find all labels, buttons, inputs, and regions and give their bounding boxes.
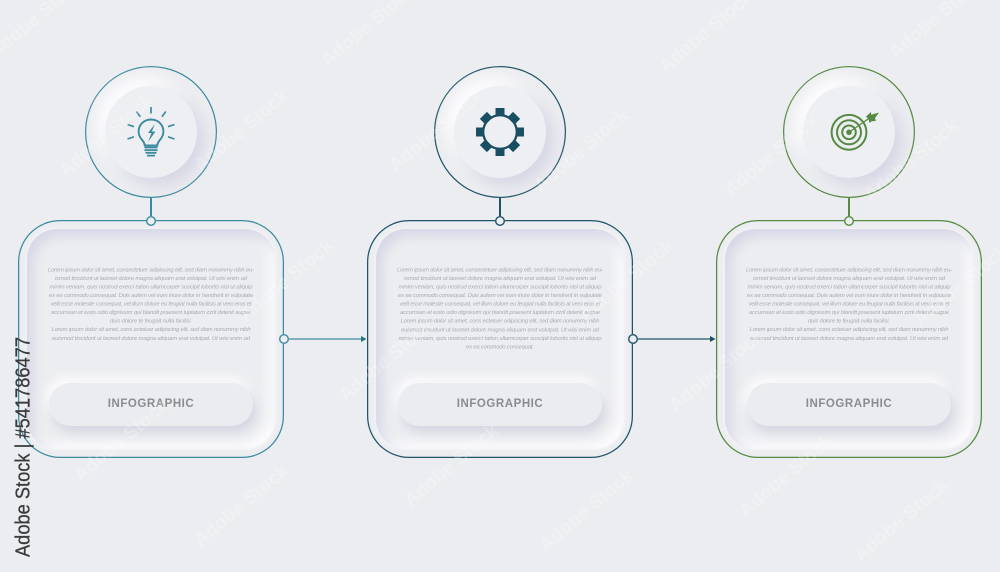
icon: gear bbox=[476, 108, 524, 156]
arrow 2 to 3 bbox=[638, 336, 716, 342]
watermarks: Adobe Stock bbox=[530, 105, 633, 196]
text block bbox=[48, 268, 254, 342]
watermarks: Adobe Stock bbox=[665, 325, 768, 416]
panel outline bbox=[716, 220, 982, 458]
watermarks: Adobe Stock bbox=[235, 235, 338, 326]
text block: accumsan et iusto odio dignissim qui blandit praesent luptatum zzril delenit augue bbox=[51, 310, 252, 316]
text block: Lorem ipsum dolor sit amet, cons ectetuer adipiscing elit, sed diam nonummy nibh bbox=[750, 327, 948, 333]
text block: Lorem ipsum dolor sit amet, consectetuer adipiscing elit, sed diam nonummy nibh eu- bbox=[397, 267, 603, 273]
watermarks: Adobe Stock bbox=[850, 475, 953, 566]
text block: euismod tincidunt ut laoreet dolore magna aliquam erat volutpat. Ut wisi enim ad bbox=[750, 336, 949, 342]
inset card bbox=[27, 229, 275, 449]
connector node top bbox=[146, 216, 156, 226]
text block: minim veniam, quis nostrud exerci tation ullamcorper suscipit lobortis nisl ut aliquip bbox=[50, 285, 253, 291]
text block: euismod tincidunt ut laoreet dolore magna aliquam erat volutpat. Ut wisi enim ad bbox=[52, 336, 251, 342]
text block: velit esse molestie consequat, vel illum dolore eu feugiat nulla facilisis at vero eros et bbox=[748, 302, 950, 308]
text block: duis dolore te feugait nulla facilisi. bbox=[808, 319, 890, 325]
panel outline bbox=[18, 220, 284, 458]
icon ring bbox=[85, 66, 217, 198]
watermarks: Adobe Stock bbox=[55, 90, 158, 181]
text block: Lorem ipsum dolor sit amet, consectetuer adipiscing elit, sed diam nonummy nibh eu- bbox=[48, 268, 254, 274]
text block: minim veniam, quis nostrud exerci tation ullamcorper suscipit lobortis nisl ut aliquip bbox=[748, 285, 951, 291]
watermarks: Adobe Stock bbox=[70, 395, 173, 486]
icon ring bbox=[783, 66, 915, 198]
button label: INFOGRAPHIC bbox=[457, 398, 543, 410]
watermarks: Adobe Stock bbox=[720, 110, 823, 201]
connector node top bbox=[495, 216, 505, 226]
icon disk bbox=[105, 86, 197, 178]
watermarks: Adobe Stock bbox=[535, 465, 638, 556]
panel outline bbox=[367, 220, 633, 458]
watermarks: Adobe Stock bbox=[385, 85, 488, 176]
text block: accumsan et iusto odio dignissim qui blandit praesent luptatum zzril delenit augue bbox=[400, 310, 601, 316]
connector node right bbox=[628, 334, 638, 344]
text block: ismod tincidunt ut laoreet dolore magna aliquam erat volutpat. Ut wisi enim ad bbox=[55, 276, 248, 282]
connector stem bbox=[848, 198, 850, 216]
text block: ex ea commodo consequat. Duis autem vel eum iriure dolor in hendrerit in vulputate bbox=[747, 293, 952, 299]
connector node top bbox=[844, 216, 854, 226]
text block: velit esse molestie consequat, vel illum dolore eu feugiat nulla facilisis at vero eros et bbox=[400, 301, 601, 307]
text block: ex ea commodo consequat. Duis autem vel eum iriure dolor in hendrerit in vulputate bbox=[49, 293, 254, 299]
text block: ex ea commodo consequat. bbox=[466, 345, 534, 351]
button label bbox=[49, 383, 253, 426]
watermarks: Adobe Stock bbox=[860, 115, 963, 206]
text block: Lorem ipsum dolor sit amet, cons ectetuer adipiscing elit, sed diam nonummy nibh bbox=[52, 327, 250, 333]
icon: light bulb bbox=[127, 107, 175, 156]
button label: INFOGRAPHIC bbox=[108, 398, 194, 410]
panel: step 1 bbox=[18, 66, 289, 458]
panel: step 2 bbox=[367, 66, 638, 458]
text block: velit esse molestie consequat, vel illum dolore eu feugiat nulla facilisis at vero eros et bbox=[50, 302, 252, 308]
text block: minim veniam, quis nostrud exerci tation ullamcorper suscipit lobortis nisl ut aliquip bbox=[398, 285, 602, 291]
inset card bbox=[376, 229, 624, 449]
text block: ismod tincidunt ut laoreet dolore magna aliquam erat volutpat. Ut wisi enim ad bbox=[753, 276, 946, 282]
button label bbox=[747, 383, 951, 426]
text block: minim veniam, quis nostrud exerci tation ullamcorper suscipit lobortis nisl ut aliquip bbox=[398, 336, 602, 342]
text block bbox=[746, 268, 952, 342]
button label: INFOGRAPHIC bbox=[806, 398, 892, 410]
button label bbox=[398, 383, 602, 426]
text block: ex ea commodo consequat. Duis autem vel eum iriure dolor in hendrerit in vulputate bbox=[398, 293, 603, 299]
text block bbox=[397, 267, 603, 351]
connector stem bbox=[499, 198, 501, 216]
connector node right bbox=[279, 334, 289, 344]
icon ring bbox=[434, 66, 566, 198]
text block: Lorem ipsum dolor sit amet, cons ectetuer adipiscing elit, sed diam nonummy nibh bbox=[400, 319, 600, 325]
arrow 1 to 2 bbox=[289, 336, 366, 342]
watermarks: Adobe Stock bbox=[190, 85, 293, 176]
text block: duis dolore te feugait nulla facilisi. bbox=[110, 319, 192, 325]
text block: accumsan et iusto odio dignissim qui blandit praesent luptatum zzril delenit augue bbox=[749, 310, 950, 316]
text block: ismod tincidunt ut laoreet dolore magna aliquam erat volutpat. Ut wisi enim ad bbox=[404, 276, 597, 282]
inset card bbox=[725, 229, 973, 449]
watermarks: Adobe Stock bbox=[400, 420, 503, 511]
watermarks: Adobe Stock bbox=[335, 315, 438, 406]
watermarks: Adobe Stock bbox=[735, 430, 838, 521]
stock id label: Adobe Stock | #541786477 bbox=[12, 337, 34, 557]
icon disk bbox=[454, 86, 546, 178]
icon disk bbox=[803, 86, 895, 178]
panel: step 3 bbox=[716, 66, 982, 458]
watermarks: Adobe Stock bbox=[190, 460, 293, 551]
text block: Lorem ipsum dolor sit amet, consectetuer adipiscing elit, sed diam nonummy nibh eu- bbox=[746, 268, 952, 274]
icon: target with arrow bbox=[830, 112, 879, 151]
watermarks: Adobe Stock bbox=[575, 235, 678, 326]
text block: euismod tincidunt ut laoreet dolore magna aliquam erat volutpat. Ut wisi enim ad bbox=[401, 327, 600, 333]
connector stem bbox=[150, 198, 152, 216]
